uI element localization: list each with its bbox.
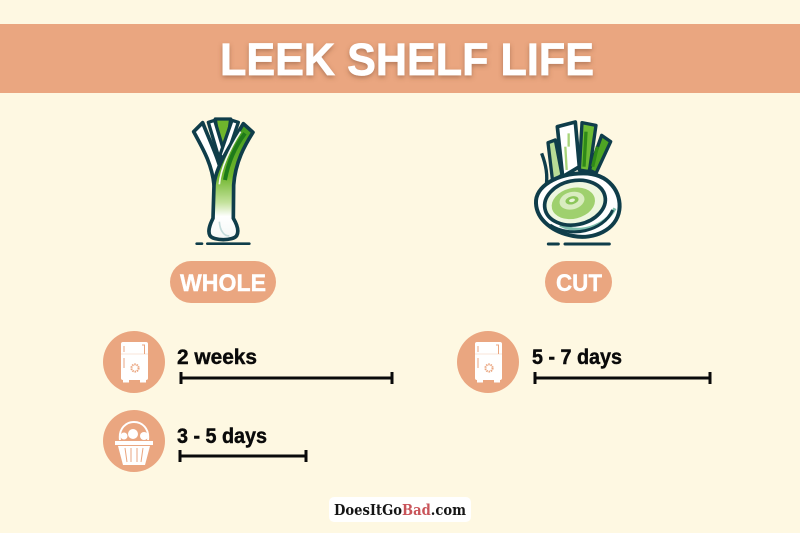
label: whole in fridge duration: 2 weeks [177, 345, 257, 369]
icon: cut leek [536, 122, 620, 244]
icon: fridge, cut leek [457, 331, 519, 393]
pill: whole [170, 261, 276, 303]
label: cut in fridge duration: 5 - 7 days [532, 345, 622, 369]
leek slices [536, 173, 620, 237]
pill: whole: WHOLE [180, 270, 266, 297]
pill: cut: CUT [556, 270, 602, 297]
logo: DoesItGoBad.com [334, 502, 467, 519]
icon: basket [103, 410, 165, 472]
icon: fridge, whole leek [103, 331, 165, 393]
title: LEEK SHELF LIFE [220, 34, 594, 85]
icon: whole leek [194, 119, 253, 244]
bar: 3 - 5 days [180, 450, 306, 462]
title banner [0, 24, 800, 93]
bar: 5 - 7 days [535, 372, 710, 384]
bar: 2 weeks [181, 372, 392, 384]
pill: cut [545, 261, 612, 303]
logo [329, 497, 471, 522]
label: whole at room temperature duration: 3 - 5 days [177, 424, 267, 448]
